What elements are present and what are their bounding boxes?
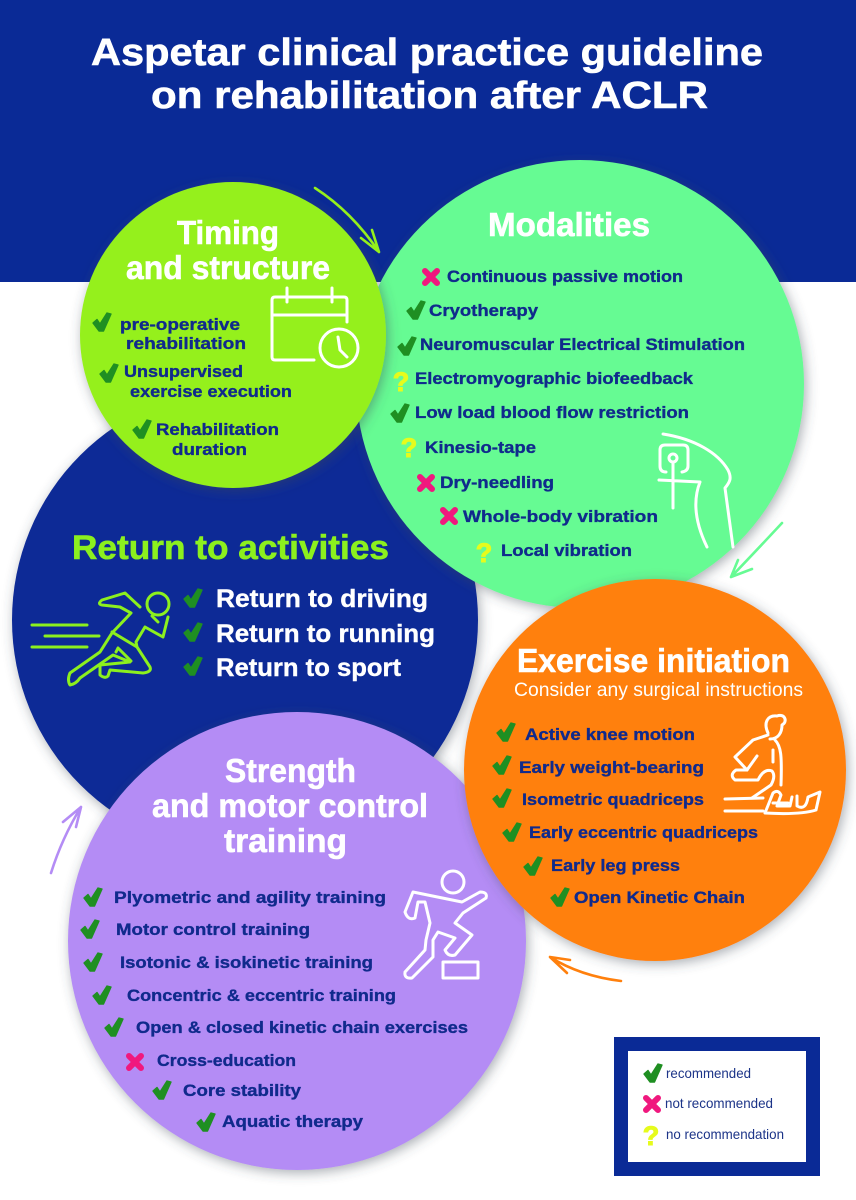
list: modalities items: Dry-needling bbox=[440, 473, 554, 492]
list: modalities items: Cryotherapy bbox=[429, 301, 539, 320]
list: strength items: Open & closed kinetic chain exercises bbox=[136, 1018, 468, 1037]
title: on rehabilitation after ACLR bbox=[151, 75, 708, 117]
arrow: orange bbox=[550, 957, 621, 981]
circle: timing and structure bbox=[80, 182, 386, 488]
list: modalities items: Electromyographic biofeedback bbox=[415, 369, 694, 388]
list: exercise items: Active knee motion bbox=[525, 725, 695, 744]
list: strength items: Concentric & eccentric training bbox=[127, 986, 396, 1005]
circle: modalities bbox=[356, 160, 804, 608]
icon: physio with patient bbox=[725, 715, 820, 814]
icon: knee with electrode bbox=[659, 434, 733, 547]
list: modalities items: Local vibration bbox=[501, 541, 632, 560]
list: return items: Return to driving bbox=[216, 585, 428, 613]
list: modalities items: Continuous passive motion bbox=[447, 267, 683, 286]
heading: return to activities: Return to activities bbox=[72, 529, 389, 567]
title: Aspetar clinical practice guideline bbox=[91, 32, 763, 74]
legend: no recommendation bbox=[643, 1121, 784, 1151]
heading: strength: Strength bbox=[225, 752, 356, 789]
heading: exercise initiation: Exercise initiation bbox=[517, 642, 790, 679]
legend bbox=[621, 1044, 813, 1169]
circle: exercise initiation bbox=[464, 579, 846, 961]
legend frame bbox=[621, 1044, 813, 1169]
icon: calendar and clock bbox=[272, 288, 358, 367]
icon: step-up figure bbox=[405, 871, 486, 978]
list: return items: Return to sport bbox=[216, 654, 402, 682]
list: strength items: Core stability bbox=[183, 1081, 302, 1100]
list: return items bbox=[184, 585, 435, 682]
legend: recommended bbox=[644, 1064, 751, 1082]
list: exercise items: Early leg press bbox=[551, 856, 680, 875]
list: timing items bbox=[93, 313, 292, 459]
list: timing items: rehabilitation bbox=[126, 334, 246, 353]
arrow: purple bbox=[51, 807, 81, 873]
heading: timing and structure bbox=[126, 214, 330, 286]
heading: strength bbox=[152, 752, 428, 859]
list: modalities items: ? bbox=[401, 433, 417, 463]
heading: modalities: Modalities bbox=[488, 206, 650, 243]
legend: recommended: recommended bbox=[666, 1065, 751, 1081]
list: timing items: duration bbox=[172, 440, 247, 459]
list: modalities items: Low load blood flow restriction bbox=[415, 403, 689, 422]
list: timing items: Unsupervised bbox=[124, 362, 243, 381]
list: modalities items: Neuromuscular Electrical Stimulation bbox=[420, 335, 745, 354]
list: strength items: Cross-education bbox=[157, 1051, 296, 1070]
legend: not recommended: not recommended bbox=[665, 1095, 773, 1111]
list: timing items: exercise execution bbox=[130, 382, 292, 401]
panel: exercise initiation bbox=[464, 579, 846, 961]
title bbox=[91, 32, 763, 117]
panel: return to activities bbox=[12, 387, 478, 853]
legend: no recommendation: ? bbox=[643, 1121, 659, 1151]
list: exercise items: Early eccentric quadriceps bbox=[529, 823, 758, 842]
heading: strength: and motor control bbox=[152, 787, 428, 824]
list: modalities items bbox=[391, 267, 745, 568]
circle: strength bbox=[68, 712, 526, 1170]
list: strength items: Motor control training bbox=[116, 920, 310, 939]
circle: return to activities bbox=[12, 387, 478, 853]
panel: timing and structure bbox=[80, 182, 386, 488]
arrow: mint bbox=[731, 523, 782, 577]
list: strength items: Plyometric and agility training bbox=[114, 888, 386, 907]
icon: runner bbox=[32, 593, 169, 685]
heading: timing and structure: and structure bbox=[126, 249, 330, 286]
subheading: surgical instructions: Consider any surgical instructions bbox=[514, 680, 803, 701]
list: timing items: Rehabilitation bbox=[156, 420, 279, 439]
heading: timing and structure: Timing bbox=[177, 214, 279, 251]
panel: modalities bbox=[356, 160, 804, 608]
header background band bbox=[0, 0, 856, 282]
legend: no recommendation: no recommendation bbox=[666, 1126, 784, 1142]
list: timing items: pre-operative bbox=[120, 315, 240, 334]
list: strength items: Aquatic therapy bbox=[222, 1112, 364, 1131]
list: strength items bbox=[81, 888, 468, 1131]
arrow: lime bbox=[315, 188, 379, 252]
list: modalities items: Whole-body vibration bbox=[463, 507, 658, 526]
heading: strength: training bbox=[224, 822, 347, 859]
list: modalities items: Kinesio-tape bbox=[425, 438, 536, 457]
list: exercise items: Isometric quadriceps bbox=[522, 790, 704, 809]
panel: strength and motor control training bbox=[68, 712, 526, 1170]
list: modalities items: ? bbox=[476, 538, 492, 568]
list: return items: Return to running bbox=[216, 620, 435, 648]
list: strength items: Isotonic & isokinetic training bbox=[120, 953, 373, 972]
list: exercise items: Open Kinetic Chain bbox=[574, 888, 745, 907]
list: modalities items: ? bbox=[393, 367, 409, 397]
list: exercise items: Early weight-bearing bbox=[519, 758, 704, 777]
list: exercise items bbox=[493, 723, 758, 907]
